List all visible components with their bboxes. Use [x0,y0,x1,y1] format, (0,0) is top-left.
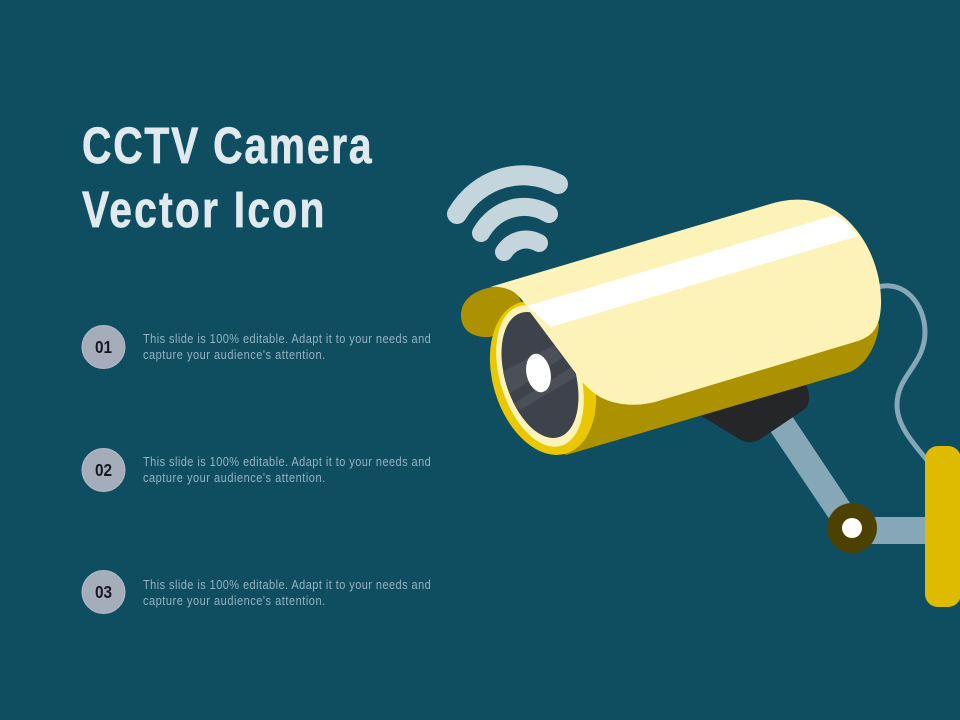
cable [878,286,927,460]
list item 02 [82,448,431,492]
title [82,117,372,238]
pivot joint [827,503,877,553]
lens centre [523,351,554,395]
camera hood [490,200,881,405]
camera bracket [698,378,809,442]
support arm [766,410,926,544]
list item 01: This slide is 100% editable. Adapt it to your needs and [143,332,431,346]
list item 02: This slide is 100% editable. Adapt it to your needs and [143,455,431,469]
list item 03: 03 [95,582,112,602]
list item 03: This slide is 100% editable. Adapt it to your needs and [143,578,431,592]
list item 02: 02 [95,460,112,480]
list item 02: capture your audience's attention. [143,471,325,485]
lens rim [472,288,614,468]
lens glass [488,303,592,447]
title: CCTV Camera [82,117,372,174]
list item 01: capture your audience's attention. [143,348,325,362]
title: Vector Icon [82,181,324,238]
infographic slide [82,126,960,614]
icon: cctv camera [461,200,960,607]
list item 01 [82,326,431,368]
list item 03: capture your audience's attention. [143,594,325,608]
wall mount plate [925,446,960,607]
camera body underside [540,300,879,455]
hood back fold [461,287,530,337]
hood highlight stripe [527,215,858,327]
list item 01: 01 [95,337,112,357]
lens reflections [500,345,576,410]
icon: wifi signal [457,175,558,252]
list item 03 [82,570,431,614]
lens ring [480,294,600,458]
